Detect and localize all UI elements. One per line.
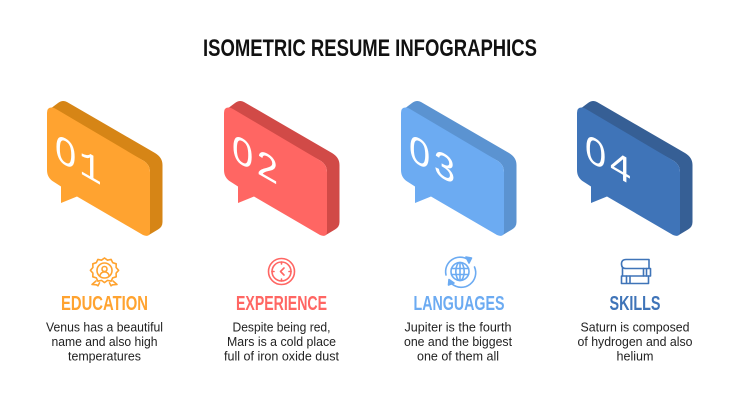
icon: speech bubble 02: 0 bbox=[232, 125, 253, 179]
text block: Saturn is composed bbox=[580, 320, 690, 334]
text block: Mars is a cold place bbox=[227, 335, 336, 349]
text block: full of iron oxide dust bbox=[224, 350, 340, 364]
text block: Despite being red, bbox=[232, 320, 330, 334]
icon: speech bubble 03: 3 bbox=[433, 142, 456, 198]
heading: LANGUAGES bbox=[414, 293, 504, 315]
icon: stack of books bbox=[622, 260, 650, 284]
text block bbox=[404, 320, 513, 364]
icon: speech bubble 03: 0 bbox=[409, 125, 430, 179]
icon: speech bubble 02: 2 bbox=[256, 142, 279, 198]
text block bbox=[578, 320, 693, 364]
icon: speech bubble 01: 0 bbox=[55, 125, 76, 179]
text block: of hydrogen and also bbox=[578, 335, 693, 349]
panel: education bbox=[46, 101, 163, 363]
icon: speech bubble 03 bbox=[401, 101, 516, 236]
text block: one of them all bbox=[417, 350, 499, 364]
text block: Venus has a beautiful bbox=[46, 320, 163, 334]
text block bbox=[224, 320, 340, 364]
text block: one and the biggest bbox=[404, 335, 513, 349]
icon: speech bubble 01 bbox=[47, 101, 162, 236]
icon: award badge bbox=[90, 258, 119, 286]
text block: temperatures bbox=[68, 350, 141, 364]
heading: SKILLS bbox=[610, 293, 660, 315]
icon: clock bbox=[268, 258, 294, 284]
text block bbox=[46, 320, 163, 364]
icon: globe with arrows bbox=[446, 257, 476, 287]
icon: speech bubble 02 bbox=[224, 101, 340, 236]
icon: speech bubble 04: 0 bbox=[585, 125, 606, 179]
icon: speech bubble 04: 4 bbox=[609, 142, 632, 198]
panel: experience bbox=[224, 101, 340, 363]
text block: helium bbox=[616, 350, 654, 364]
panel: skills bbox=[577, 101, 693, 363]
text block: Jupiter is the fourth bbox=[404, 320, 512, 334]
panel: languages bbox=[401, 101, 516, 363]
heading: EDUCATION bbox=[61, 293, 148, 315]
text block: name and also high bbox=[52, 335, 158, 349]
icon: speech bubble 01: 1 bbox=[79, 142, 102, 198]
icon: speech bubble 04 bbox=[577, 101, 692, 236]
title: ISOMETRIC RESUME INFOGRAPHICS bbox=[203, 35, 537, 62]
heading: EXPERIENCE bbox=[236, 293, 327, 315]
